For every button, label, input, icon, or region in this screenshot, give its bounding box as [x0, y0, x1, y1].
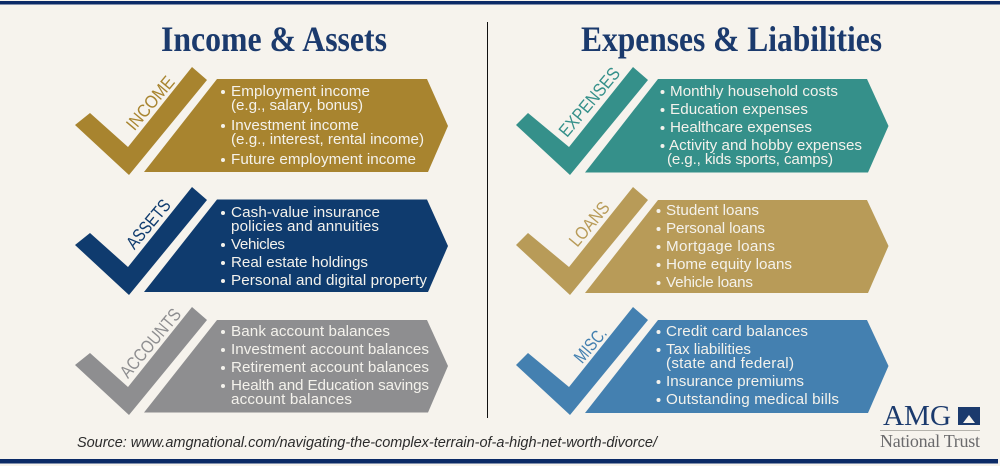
icon: misc check mark: [516, 307, 648, 415]
logo: AMG National Trust: [880, 401, 980, 451]
panel: accounts: [75, 305, 448, 415]
arrow: misc list: Tax liabilities: [666, 341, 751, 358]
panel: assets: [75, 187, 448, 295]
arrow: accounts list: Retirement account balances: [231, 359, 429, 376]
arrow: loans list: Student loans: [666, 202, 759, 219]
icon: loans check mark: [516, 187, 648, 295]
arrow: loans list: [585, 200, 888, 293]
arrow: assets list: Real estate holdings: [231, 254, 368, 271]
arrow: accounts list: account balances: [231, 391, 352, 408]
label: expenses: EXPENSES: [555, 64, 624, 141]
arrow: income list: (e.g., salary, bonus): [231, 97, 363, 114]
icon: accounts check mark: [75, 307, 207, 415]
arrow: loans list: Mortgage loans: [666, 238, 775, 255]
title: Expenses & Liabilities: Expenses & Liabilities: [581, 19, 882, 59]
icon: logo square: [958, 407, 980, 425]
label: income: INCOME: [122, 72, 179, 134]
arrow: expenses list: Monthly household costs: [670, 83, 838, 100]
arrow: loans list: Vehicle loans: [666, 274, 753, 291]
icon: expenses check mark: [516, 67, 648, 175]
arrow: income list: [144, 79, 448, 172]
label: misc: MISC.: [570, 323, 611, 367]
arrow: misc list: [585, 320, 888, 413]
arrow: loans list: Home equity loans: [666, 256, 792, 273]
arrow: income list: Employment income: [231, 83, 370, 100]
arrow: accounts list: Health and Education savings: [231, 377, 429, 394]
panel: income: [75, 67, 448, 175]
arrow: expenses list: [585, 79, 888, 172]
arrow: expenses list: (e.g., kids sports, camps): [667, 151, 833, 168]
arrow: misc list: Outstanding medical bills: [666, 391, 839, 408]
title: Income & Assets: Income & Assets: [161, 19, 387, 59]
icon: assets check mark: [75, 187, 207, 295]
icon: income check mark: [75, 67, 207, 175]
arrow: misc list: (state and federal): [666, 355, 794, 372]
logo: AMG National Trust: AMG: [883, 401, 951, 432]
arrow: assets list: Vehicles: [231, 236, 285, 253]
arrow: assets list: [144, 200, 448, 292]
arrow: expenses list: Education expenses: [670, 101, 808, 118]
arrow: income list: Investment income: [231, 117, 359, 134]
arrow: accounts list: [144, 320, 448, 412]
arrow: misc list: Insurance premiums: [666, 373, 804, 390]
arrow: loans list: Personal loans: [666, 220, 765, 237]
arrow: assets list: policies and annuities: [231, 218, 379, 235]
arrow: income list: (e.g., interest, rental income): [231, 131, 424, 148]
source note: Source: www.amgnational.com/navigating-the-complex-terrain-of-a-high-net-worth-divorce/: [77, 435, 659, 451]
label: assets: ASSETS: [122, 196, 175, 253]
arrow: assets list: Personal and digital property: [231, 272, 427, 289]
label: loans: LOANS: [565, 198, 614, 250]
arrow: assets list: Cash-value insurance: [231, 204, 380, 221]
logo: AMG National Trust: National Trust: [880, 431, 980, 451]
panel: misc: [516, 307, 888, 415]
panel: loans: [516, 187, 888, 295]
arrow: expenses list: Healthcare expenses: [670, 119, 812, 136]
arrow: accounts list: Investment account balances: [231, 341, 429, 358]
arrow: expenses list: Activity and hobby expenses: [669, 137, 862, 154]
arrow: accounts list: Bank account balances: [231, 323, 390, 340]
label: accounts: ACCOUNTS: [116, 305, 185, 382]
arrow: misc list: Credit card balances: [666, 323, 808, 340]
arrow: income list: Future employment income: [231, 151, 416, 168]
panel: expenses: [516, 64, 888, 175]
